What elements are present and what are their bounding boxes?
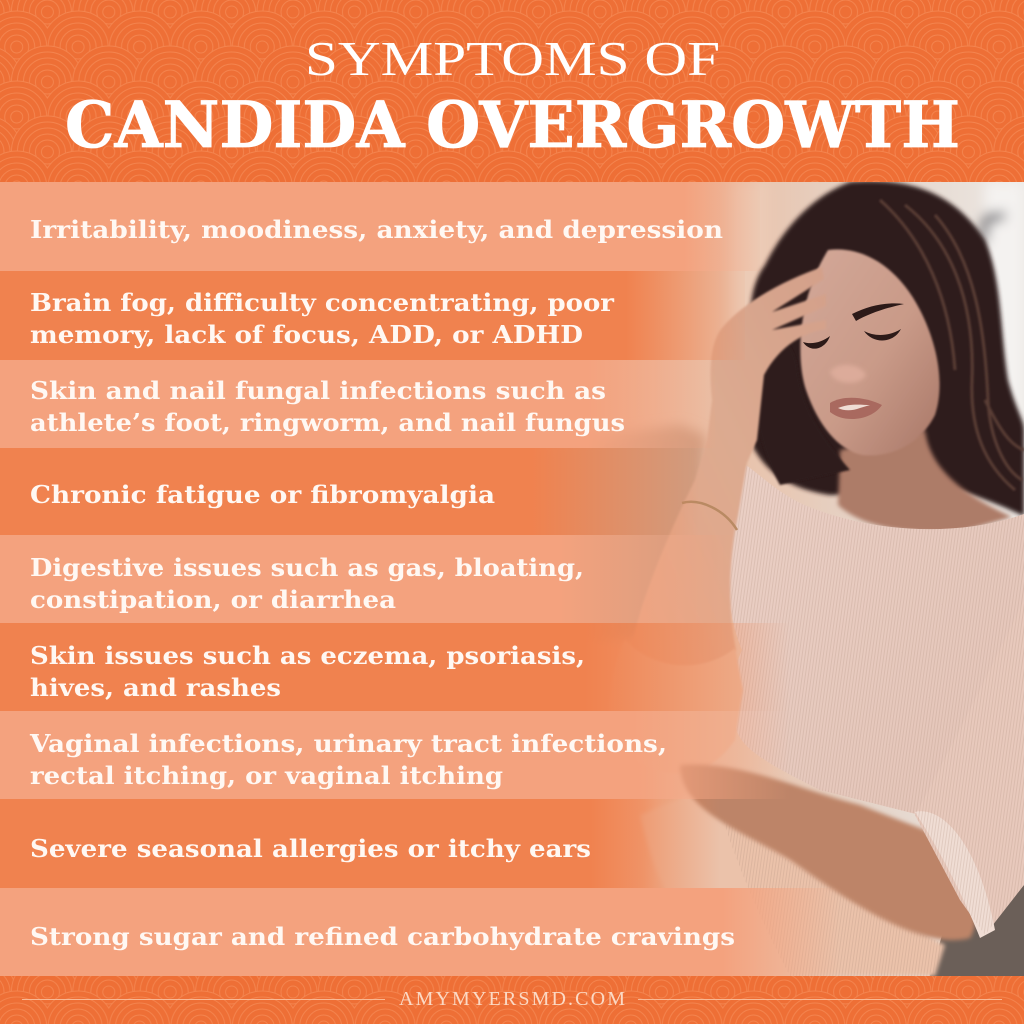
hair back bbox=[749, 181, 1024, 516]
title bbox=[65, 31, 960, 163]
facial features bbox=[803, 303, 904, 419]
lower forearm bbox=[680, 764, 975, 940]
window and shelf blur bbox=[730, 182, 1024, 422]
footer band with scale pattern bbox=[0, 976, 1024, 1024]
lower sweater bbox=[642, 812, 948, 976]
row 1 bbox=[0, 182, 760, 271]
row 4 bbox=[0, 448, 700, 535]
footer website: AMYMYERSMD.COM bbox=[399, 988, 625, 1010]
row 6: Skin issues such as eczema, psoriasis, bbox=[30, 641, 585, 670]
row 5: constipation, or diarrhea bbox=[30, 585, 396, 614]
hair highlights bbox=[880, 200, 1024, 490]
row 7: Vaginal infections, urinary tract infections, bbox=[29, 729, 667, 758]
row 3: athlete’s foot, ringworm, and nail fungus bbox=[30, 408, 625, 437]
raised hand and forearm bbox=[630, 267, 826, 668]
hair strand beside cheek bbox=[769, 454, 851, 486]
right sleeve and cuff bbox=[915, 600, 1024, 935]
row 5: Digestive issues such as gas, bloating, bbox=[30, 553, 584, 582]
row 1: Irritability, moodiness, anxiety, and depression bbox=[30, 215, 723, 244]
row 4: Chronic fatigue or fibromyalgia bbox=[30, 480, 495, 509]
face bbox=[800, 249, 940, 455]
row 3 bbox=[0, 360, 715, 448]
bracelet bbox=[682, 502, 737, 530]
row 2 bbox=[0, 271, 745, 360]
row 7 bbox=[0, 711, 790, 799]
sweater bbox=[725, 465, 1024, 830]
dark sofa bottom right bbox=[930, 885, 1024, 976]
sleeve cuff bbox=[702, 652, 744, 758]
title: CANDIDA OVERGROWTH bbox=[65, 88, 960, 163]
row 9 bbox=[0, 888, 840, 976]
row 2: Brain fog, difficulty concentrating, poor bbox=[30, 288, 615, 317]
row 6: hives, and rashes bbox=[30, 673, 281, 702]
photo: woman with hand on forehead bbox=[500, 181, 1024, 976]
sofa bbox=[578, 424, 706, 623]
title: SYMPTOMS OF bbox=[305, 31, 720, 86]
row 9: Strong sugar and refined carbohydrate cravings bbox=[30, 922, 735, 951]
symptom rows bbox=[0, 182, 840, 976]
row 8: Severe seasonal allergies or itchy ears bbox=[30, 834, 591, 863]
neck and chest bbox=[838, 430, 1012, 533]
row 5 bbox=[0, 535, 735, 623]
wall background bbox=[598, 182, 1024, 976]
row 7: rectal itching, or vaginal itching bbox=[30, 761, 503, 790]
row 2: memory, lack of focus, ADD, or ADHD bbox=[30, 320, 583, 349]
row 3: Skin and nail fungal infections such as bbox=[30, 376, 606, 405]
row 8 bbox=[0, 799, 720, 888]
header band with scale pattern bbox=[0, 0, 1024, 182]
row 6 bbox=[0, 623, 790, 711]
